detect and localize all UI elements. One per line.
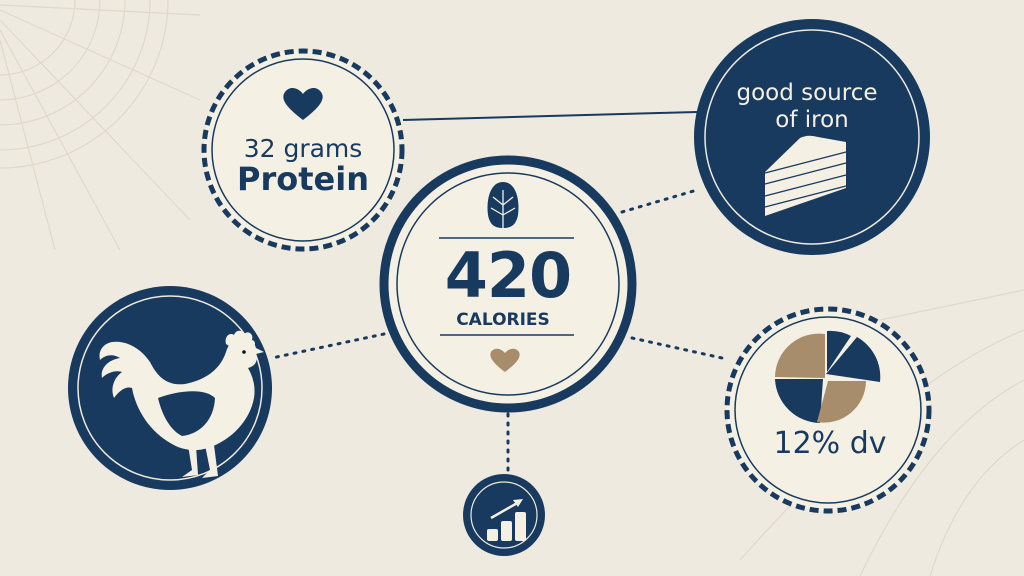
panel: iron xyxy=(694,19,930,255)
panel: protein xyxy=(204,51,402,249)
icon: heart xyxy=(283,88,323,120)
text: 12% dv: 12% dv xyxy=(773,426,887,461)
panel: iron: of iron xyxy=(775,107,849,133)
text: 32 grams: 32 grams xyxy=(244,134,362,163)
panel: calories xyxy=(384,160,632,408)
text: good source of iron: good source xyxy=(736,80,878,106)
icon: growth chart circle xyxy=(463,474,545,556)
pie chart xyxy=(775,331,880,423)
text: 420: 420 xyxy=(445,239,571,312)
panel: 12% dv xyxy=(727,309,929,511)
icon: tan heart xyxy=(490,349,520,372)
icon: leaf xyxy=(488,182,518,228)
text: Protein: Protein xyxy=(237,160,369,198)
connector lines xyxy=(272,112,722,472)
icon: cake slice xyxy=(765,136,846,216)
icon: rooster xyxy=(100,331,264,478)
panel: chicken xyxy=(68,286,272,490)
text: CALORIES: CALORIES xyxy=(456,310,550,330)
